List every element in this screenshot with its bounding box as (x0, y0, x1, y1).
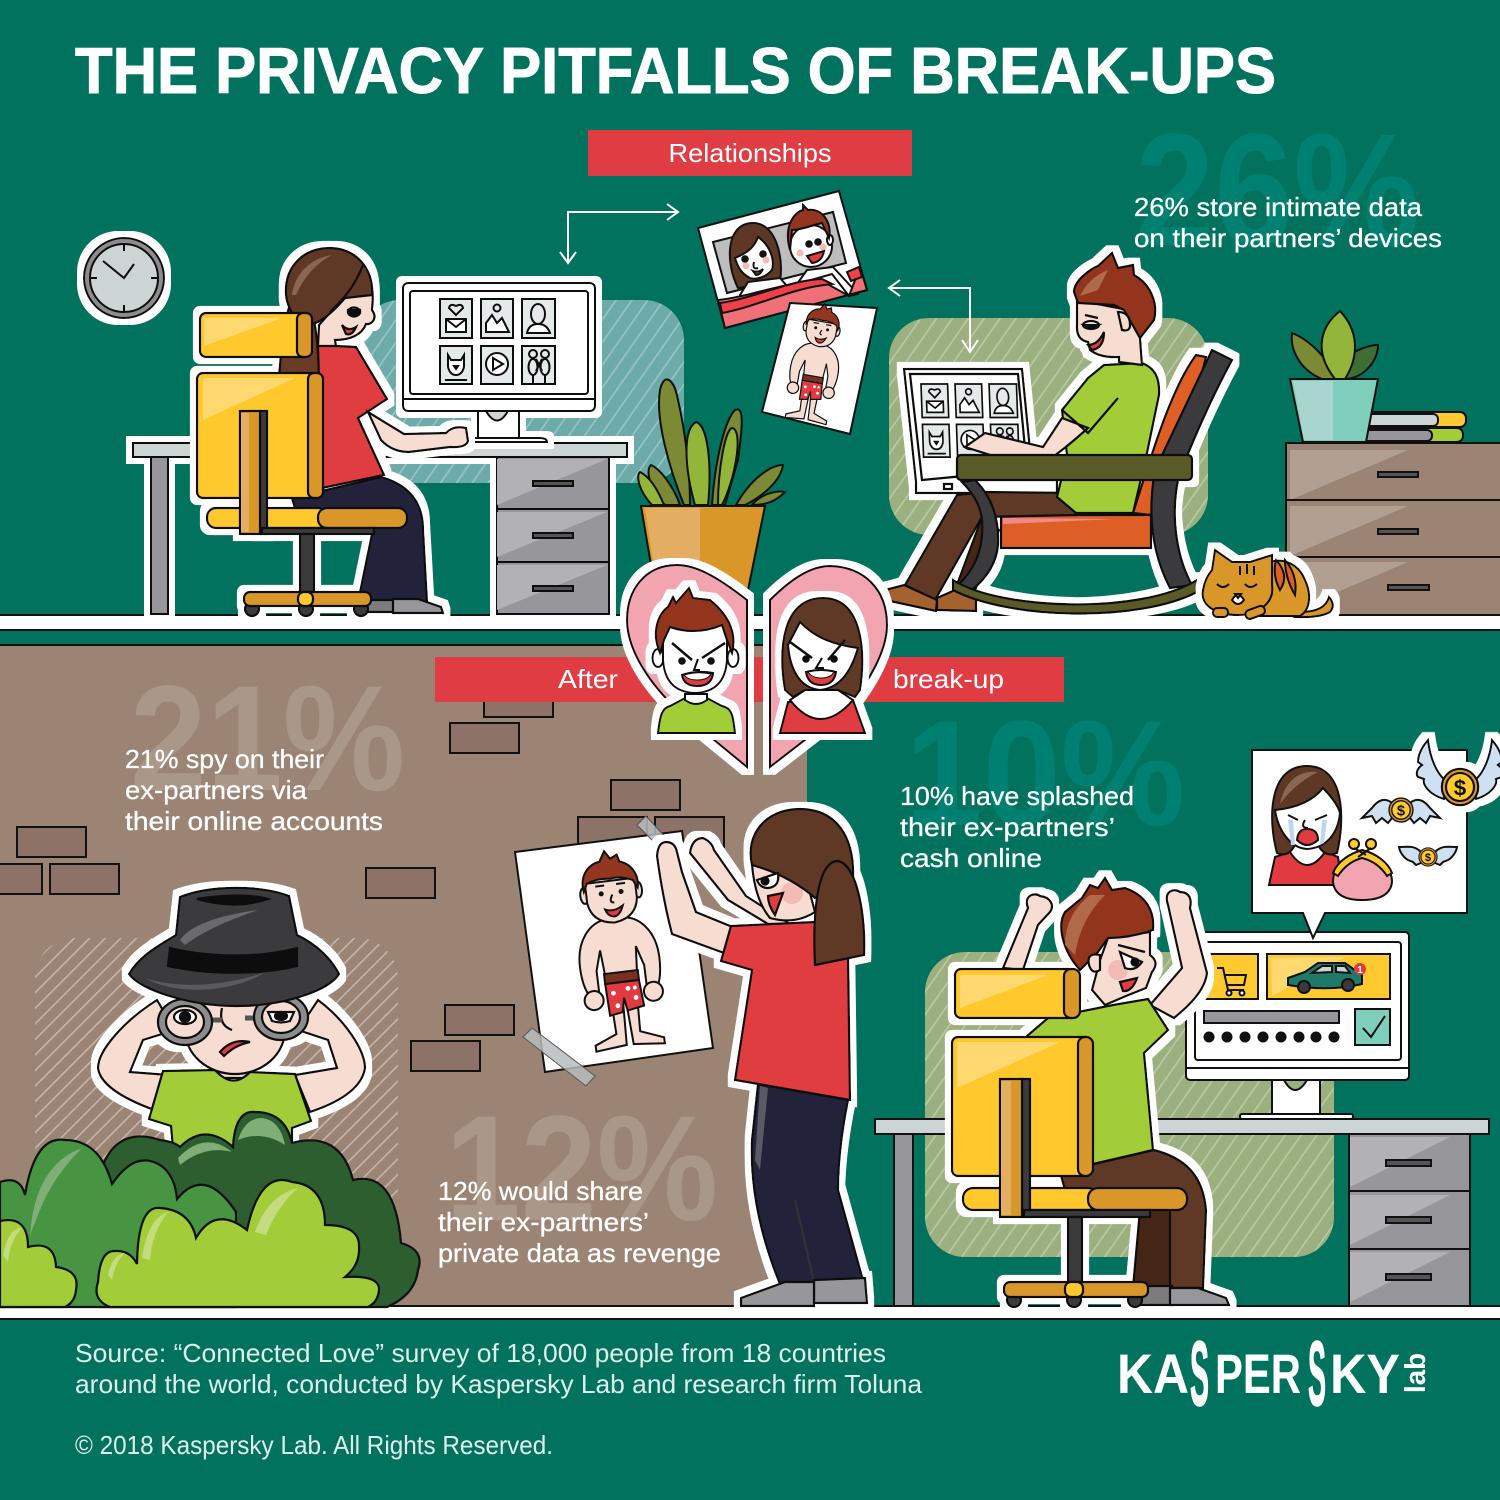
checkbox (1355, 1009, 1390, 1045)
trousers (905, 492, 1076, 600)
head (1077, 300, 1154, 365)
eye and mouth (757, 873, 783, 915)
red shirt (318, 345, 387, 488)
stat: 10%: 10% have splashed (900, 781, 1134, 811)
binoculars (158, 994, 308, 1045)
purse (1333, 839, 1392, 900)
hatched panel: spy (35, 938, 398, 1228)
heart: angry man (627, 565, 747, 767)
stat: 10%: their ex-partners’ (900, 812, 1115, 842)
heading: After break-up: After (558, 664, 618, 694)
tablet (904, 369, 1057, 493)
source note: Source: “Connected Love” survey of 18,000 people from 18 countries (75, 1338, 886, 1368)
man and chair (952, 878, 1229, 1307)
trousers (752, 1084, 864, 1284)
arm (965, 418, 1088, 465)
flying coin: large (1417, 740, 1500, 805)
logo: Kaspersky Lab (1117, 1323, 1432, 1425)
trousers (292, 477, 427, 602)
floor: upper room (0, 614, 1500, 631)
face (752, 855, 815, 920)
heart shape (770, 566, 887, 767)
arrow: photos to man's tablet (889, 280, 978, 352)
computer: upper left (403, 283, 595, 442)
car tile (1267, 954, 1390, 999)
stat: 26% (1134, 192, 1442, 253)
photo: couple in bed (698, 191, 867, 328)
stat: 10% (900, 781, 1134, 873)
books (1362, 412, 1466, 442)
heading: Relationships (588, 130, 912, 176)
hair (751, 809, 853, 898)
front bushes (0, 1220, 77, 1307)
plant: small pot (1290, 311, 1378, 442)
arm (368, 412, 468, 452)
hatched panel: top left (360, 300, 684, 483)
logo: Kaspersky Lab: KA (1117, 1342, 1189, 1405)
tape (523, 816, 668, 1086)
person: angry woman posting photo (657, 809, 867, 1306)
logo: Kaspersky Lab: S (1308, 1323, 1326, 1425)
heart: angry woman (770, 566, 887, 767)
flying coin: medium (1362, 798, 1440, 823)
logo: Kaspersky Lab: lab (1400, 1353, 1432, 1393)
shoes (365, 599, 443, 613)
heading: Relationships: Relationships (668, 138, 832, 168)
stat: 26%: 26% store intimate data (1134, 192, 1423, 222)
floor: lower room (0, 1305, 1500, 1320)
front bush main (96, 1180, 379, 1307)
heart shape (627, 565, 747, 767)
big number 10%: 10% (905, 689, 1185, 857)
bricks (0, 700, 724, 1071)
rocker front leg (958, 480, 998, 590)
chair stem (240, 411, 374, 534)
chair seat (963, 1188, 1187, 1210)
stat: 12%: private data as revenge (438, 1238, 721, 1268)
green shirt (1057, 363, 1159, 513)
woman in photo (730, 223, 787, 300)
bush highlights (30, 1118, 285, 1235)
shopping cart tile (1203, 954, 1258, 999)
logo: Kaspersky Lab: KY (1330, 1342, 1400, 1405)
flying coin: small (1399, 847, 1457, 866)
arrow: woman's computer to photos (560, 204, 678, 263)
chair back (952, 1037, 1093, 1176)
drawers: right (1286, 443, 1500, 615)
logo: Kaspersky Lab: S (1190, 1323, 1209, 1425)
hair (286, 248, 372, 324)
hatched panel: top right (889, 318, 1208, 535)
ponytail (279, 293, 319, 378)
hat (129, 888, 339, 1006)
speech bubble (1252, 750, 1467, 938)
back leaves (649, 379, 785, 505)
neck (215, 1060, 251, 1078)
crying woman (1269, 766, 1342, 885)
stat: 21%: ex-partners via (125, 775, 308, 805)
stat: 12%: their ex-partners’ (438, 1207, 649, 1237)
trousers (1060, 1150, 1206, 1288)
man in photo (788, 205, 858, 296)
person: woman at computer with office chair (197, 248, 468, 616)
copyright: © 2018 Kaspersky Lab. All Rights Reserved. (75, 1430, 553, 1460)
front bush highlights (3, 1188, 298, 1280)
source note (75, 1338, 923, 1399)
stat: 12%: 12% would share (438, 1176, 643, 1206)
mid bushes (0, 1140, 236, 1307)
dark bushes (100, 1112, 420, 1307)
front leaves (638, 422, 738, 505)
face (185, 986, 285, 1074)
monitor (1186, 932, 1409, 1119)
big number 12%: 12% (445, 1084, 718, 1252)
big number 26%: 26% (1135, 100, 1420, 279)
stat: 12% (438, 1176, 721, 1268)
stat: 21% (125, 744, 383, 836)
shirt (721, 922, 850, 1100)
heading: After break-up: break-up (893, 664, 1004, 694)
hair (1074, 253, 1155, 338)
stat: 10%: cash online (900, 843, 1042, 873)
pot (641, 506, 765, 600)
chair stem (1000, 1079, 1150, 1217)
title: THE PRIVACY PITFALLS OF BREAK-UPS (75, 34, 1276, 107)
hair (1061, 878, 1153, 970)
rocker seat (1001, 515, 1151, 548)
chair back (197, 373, 323, 498)
poster: ex-partner photo with tape (515, 816, 713, 1086)
rocker runner (953, 580, 1197, 614)
logo: Kaspersky Lab: PER (1215, 1342, 1301, 1405)
ponytail (814, 861, 864, 965)
chair headrest (955, 969, 1080, 1018)
stat: 21%: their online accounts (125, 806, 383, 836)
arms (657, 838, 790, 953)
arms (98, 1000, 365, 1112)
angry man bust (652, 588, 738, 733)
source note: around the world, conducted by Kaspersky Lab and research firm Toluna (75, 1369, 923, 1399)
plant: large pot (638, 379, 785, 600)
wall: lower left (0, 644, 807, 1307)
ear, eye and mouth (1088, 945, 1145, 991)
chair headrest (200, 313, 312, 357)
chair base (244, 534, 371, 616)
desk: upper left (133, 443, 627, 614)
person: spy with binoculars (98, 888, 365, 1160)
person: man on rocking chair with tablet (885, 253, 1232, 614)
shirt (1027, 999, 1168, 1164)
person: man spending money with monitor (75, 565, 1500, 1460)
chair base (1004, 1217, 1148, 1307)
arms (1003, 894, 1052, 970)
shirt (149, 1070, 311, 1160)
big number 21%: 21% (130, 654, 405, 822)
car tile: 1 (1357, 965, 1363, 976)
heading: After break-up (435, 657, 1064, 702)
desk (875, 1119, 1489, 1306)
ear, eye and mouth (1083, 312, 1130, 350)
stat: 26%: on their partners’ devices (1134, 223, 1442, 253)
shoes (885, 585, 976, 611)
shoes (741, 1278, 867, 1306)
blanket (718, 267, 867, 328)
icon: wall clock (84, 238, 164, 318)
cat (1203, 550, 1333, 620)
bush (0, 1112, 420, 1307)
head (1092, 932, 1156, 1005)
password bar (1204, 1011, 1340, 1042)
stat: 21%: 21% spy on their (125, 744, 324, 774)
eye and mouth (342, 308, 360, 334)
angry woman bust (780, 598, 865, 733)
face (318, 288, 374, 346)
chair seat (207, 508, 407, 528)
photo: man in boxers (762, 300, 877, 434)
shoes (1130, 1286, 1229, 1305)
arm rest (957, 455, 1192, 480)
hatched panel: lower right (925, 952, 1334, 1257)
rocker back (1133, 350, 1232, 588)
